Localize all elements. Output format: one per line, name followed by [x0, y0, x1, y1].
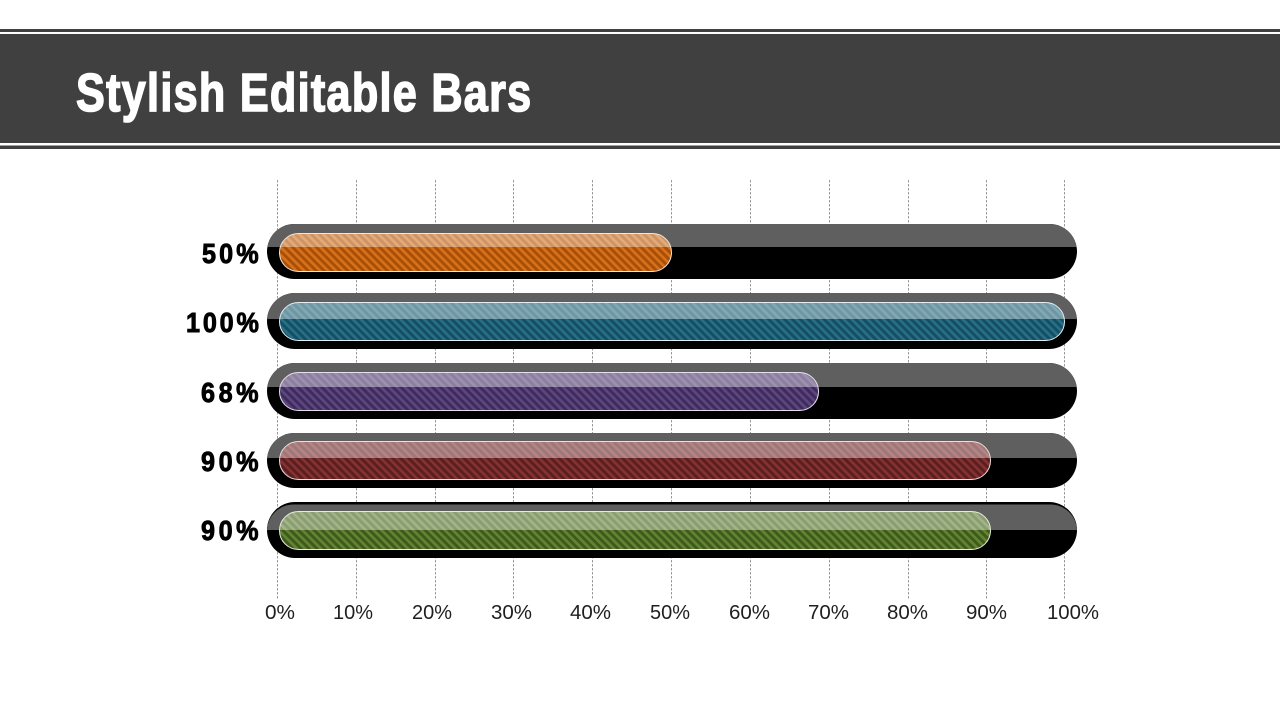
value label: 90% green row: 90%	[201, 515, 259, 546]
x axis labels: 0%	[265, 602, 295, 624]
x axis labels: 60%	[729, 602, 770, 624]
x axis labels: 20%	[412, 602, 452, 624]
header band	[0, 29, 1280, 149]
bar row: 100% teal	[267, 293, 1077, 349]
x axis labels: 100%	[1047, 602, 1099, 624]
bar row: 90% red	[267, 433, 1077, 488]
bar row: 68% purple	[267, 363, 1077, 419]
value label: 100%: 100%	[186, 307, 259, 338]
x axis labels: 10%	[333, 602, 373, 624]
title: Stylish Editable Bars	[76, 64, 531, 123]
grid lines	[278, 180, 1064, 600]
value label: 90% red row: 90%	[201, 446, 259, 477]
bar row: 50% orange	[267, 224, 1077, 279]
x axis labels: 50%	[650, 602, 690, 624]
x axis labels: 80%	[887, 602, 928, 624]
x axis labels: 90%	[966, 602, 1007, 624]
bar row: 90% green	[267, 502, 1077, 558]
x axis labels: 30%	[491, 602, 532, 624]
value label: 50%: 50%	[202, 238, 259, 269]
x axis labels: 40%	[570, 602, 611, 624]
x axis labels: 70%	[808, 602, 849, 624]
x axis labels	[265, 602, 1099, 624]
value label: 68%: 68%	[201, 377, 259, 408]
